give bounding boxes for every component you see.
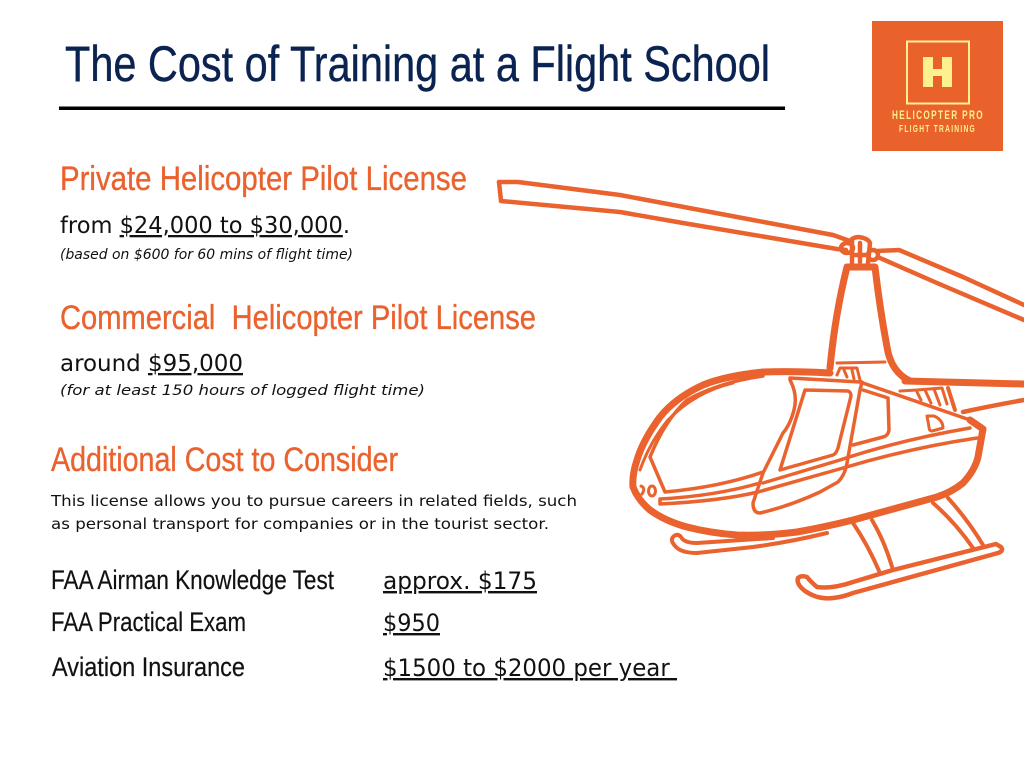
top vents	[837, 368, 860, 380]
fuselage	[633, 368, 983, 535]
cost row: FAA Practical Exam	[51, 607, 440, 637]
section: additional cost to consider	[50, 441, 577, 533]
logo: Helicopter Pro Flight Training: HELICOPTER PRO	[892, 108, 984, 122]
section: commercial helicopter pilot license	[60, 299, 536, 399]
landing skids	[672, 498, 1002, 598]
section: additional cost to consider: as personal transport for companies or in the tourist sector.	[51, 515, 549, 533]
roofline	[790, 378, 970, 420]
logo: Helicopter Pro Flight Training: FLIGHT TRAINING	[899, 123, 976, 135]
nose lights	[641, 486, 644, 494]
section: commercial helicopter pilot license: around $95,000	[60, 351, 243, 377]
door window	[780, 390, 851, 470]
section: private helicopter pilot license: from $24,000 to $30,000.	[60, 213, 350, 239]
rear window	[853, 390, 889, 445]
title: The Cost of Training at a Flight School	[65, 36, 770, 92]
section: private helicopter pilot license	[60, 160, 467, 263]
cost row: FAA Practical Exam: FAA Practical Exam	[51, 607, 246, 637]
illustration: helicopter outline	[499, 182, 1024, 598]
section: commercial helicopter pilot license: (for at least 150 hours of logged flight time)	[60, 383, 425, 399]
section: commercial helicopter pilot license: Commercial Helicopter Pilot License	[60, 299, 536, 337]
windshield	[650, 376, 763, 492]
section: private helicopter pilot license: (based on $600 for 60 mins of flight time)	[60, 247, 353, 263]
section: private helicopter pilot license: Private Helicopter Pilot License	[60, 160, 467, 198]
cost row: Aviation Insurance	[52, 652, 677, 682]
tail boom	[905, 381, 1024, 412]
cost row: Aviation Insurance: Aviation Insurance	[52, 652, 245, 682]
side vents	[900, 388, 947, 405]
logo: Helicopter Pro Flight Training	[872, 21, 1003, 151]
cost row: FAA Airman Knowledge Test	[51, 565, 537, 595]
mast	[830, 267, 910, 381]
cost row: FAA Airman Knowledge Test: approx. $175	[383, 567, 537, 595]
title	[59, 36, 785, 110]
section: additional cost to consider: This license allows you to pursue careers in related fields, such	[50, 492, 577, 510]
access panel	[927, 416, 943, 431]
cost row: FAA Airman Knowledge Test: FAA Airman Knowledge Test	[51, 565, 334, 595]
cost row: FAA Practical Exam: $950	[383, 609, 440, 637]
section: additional cost to consider: Additional Cost to Consider	[51, 441, 398, 479]
body stripes	[660, 483, 760, 504]
cost row: Aviation Insurance: $1500 to $2000 per year	[383, 654, 677, 682]
front door	[753, 380, 862, 513]
rotor blades and hub	[499, 182, 1024, 320]
